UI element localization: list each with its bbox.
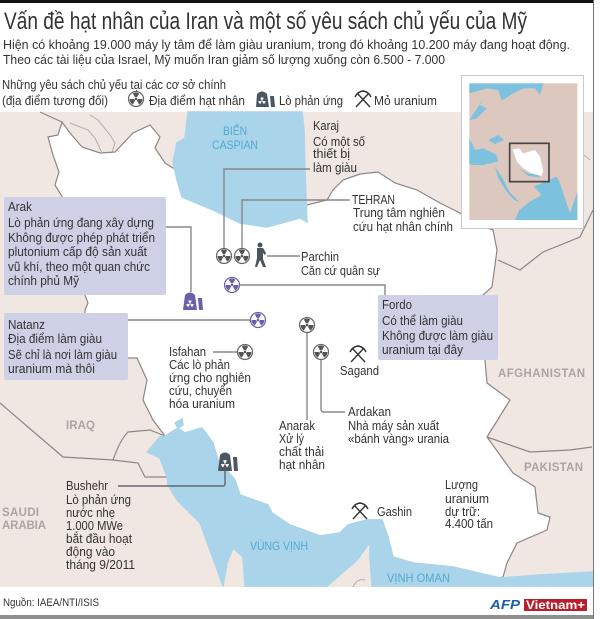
label: Parchin: Parchin <box>301 250 339 264</box>
country labels <box>2 368 585 532</box>
panel: Arak: plutonium cấp độ sản xuất <box>8 245 147 259</box>
map of Iran and neighbours <box>0 112 593 587</box>
sea label: Caspian <box>212 123 258 152</box>
icon: Parchin soldier <box>255 242 266 267</box>
label: Tehran: TEHRAN <box>352 193 395 207</box>
logo: AFP: AFP <box>489 597 520 612</box>
label: Sagand: Sagand <box>340 364 379 378</box>
label: Tehran: Trung tâm nghiên <box>353 206 445 220</box>
label: Karaj: làm giàu <box>313 161 357 175</box>
panel: Arak: Arak <box>8 200 33 214</box>
label: Ardakan: Nhà máy sản xuất <box>348 419 439 433</box>
country labels: PAKISTAN <box>524 462 583 474</box>
country labels: SAUDI <box>2 507 39 519</box>
Iran landmass <box>48 122 550 578</box>
label: uranium reserves: uranium <box>445 492 489 506</box>
Persian Gulf and Gulf of Oman <box>147 419 593 586</box>
panel: Fordo: Không được làm giàu <box>382 329 493 343</box>
label: uranium reserves: Lượng <box>445 478 478 492</box>
label: Karaj: Karaj <box>313 119 339 133</box>
icon: Arak reactor <box>183 292 203 310</box>
label: Bushehr: Bushehr <box>66 479 108 493</box>
inset locator map <box>462 76 584 228</box>
label: Ardakan: Ardakan <box>348 405 391 419</box>
icon: Natanz nuclear site <box>250 312 266 328</box>
label: Anarak: Anarak <box>279 419 316 433</box>
sea label: Vinh Oman: VỊNH OMAN <box>387 571 450 585</box>
intro text: Theo các tài liệu của Israel, Mỹ muốn Iran giảm số lượng xuống còn 6.500 - 7.000 <box>3 52 445 67</box>
intro text: Hiện có khoảng 19.000 máy ly tâm để làm giàu uranium, trong đó khoảng 10.200 máy đang hoạt động. <box>3 37 570 52</box>
right frame line <box>593 0 594 619</box>
panel: Arak: Không được phép phát triển <box>8 231 155 245</box>
icon: Gashin mine <box>352 503 368 519</box>
label: Anarak <box>279 419 325 472</box>
icon: Ardakan nuclear site <box>314 344 328 360</box>
label: Isfahan: Isfahan <box>169 345 206 359</box>
panel: Arak <box>4 197 166 295</box>
source note: Nguồn: IAEA/NTI/ISIS <box>3 597 99 609</box>
label: uranium reserves <box>445 478 493 531</box>
sea label: Caspian: CASPIAN <box>212 138 258 152</box>
legend: (địa điểm tương đối) <box>2 94 108 108</box>
panel: Fordo <box>378 295 498 360</box>
label: Karaj: Có một số <box>313 135 365 149</box>
neighbouring borders <box>0 112 593 587</box>
intro text <box>3 37 570 67</box>
label: Anarak: chất thải <box>279 445 324 459</box>
label: Karaj: thiết bị <box>313 147 350 161</box>
logo: Vietnam+: Vietnam+ <box>526 600 585 612</box>
panel: Natanz: Địa điểm làm giàu <box>8 332 102 346</box>
label: Bushehr: 1.000 MWe <box>66 519 123 533</box>
panel: Fordo: Fordo <box>382 298 412 312</box>
label: Bushehr: Lò phản ứng <box>66 493 131 507</box>
label: Bushehr: nước nhẹ <box>66 506 115 520</box>
label: Anarak: hạt nhân <box>279 458 325 472</box>
legend <box>2 78 437 108</box>
label: Gashin: Gashin <box>377 505 412 519</box>
sea label: Caspian: BIỂN <box>223 123 247 138</box>
panel: Fordo: Có thể làm giàu <box>382 314 463 328</box>
icon: Bushehr reactor <box>218 452 238 471</box>
label: Parchin: Căn cứ quân sự <box>301 264 380 278</box>
panel: Natanz <box>4 313 128 380</box>
icon: Tehran nuclear site <box>234 248 250 264</box>
icon: mine <box>355 91 371 107</box>
country labels: AFGHANISTAN <box>498 368 585 380</box>
label: Isfahan: hóa uranium <box>169 397 235 411</box>
leader lines <box>118 169 385 486</box>
icon: reactor <box>256 92 275 107</box>
icon: Fordo nuclear site <box>224 278 240 292</box>
panel: Arak: vũ khí, theo một quan chức <box>8 260 150 274</box>
legend: Địa điểm hạt nhân <box>149 94 245 108</box>
panel: Arak: Lò phản ứng đang xây dựng <box>8 216 154 230</box>
label: Isfahan: ứng cho nghiên <box>169 371 251 385</box>
legend: Những yêu sách chủ yếu tại các cơ sở chính <box>2 78 226 92</box>
sea label: Vung Vinh: VÙNG VỊNH <box>250 538 308 553</box>
label: Parchin <box>301 250 380 278</box>
label: Bushehr: động vào <box>66 545 115 559</box>
Caspian Sea <box>173 112 307 227</box>
icon: Karaj nuclear site <box>216 248 232 264</box>
label: Isfahan: cứu, chuyển <box>169 384 232 398</box>
label: Ardakan: «bánh vàng» urania <box>348 432 449 446</box>
icon: nuclear site <box>128 92 144 106</box>
legend: Lò phản ứng <box>279 94 343 108</box>
panel: Fordo: uranium tại đây <box>382 343 464 357</box>
label: Anarak: Xử lý <box>279 432 305 446</box>
panel: Arak: chính phủ Mỹ <box>8 274 80 288</box>
country labels: IRAQ <box>66 420 95 432</box>
label: Tehran: cứu hạt nhân chính <box>353 220 453 234</box>
legend: Mỏ uranium <box>374 94 437 108</box>
label: Bushehr <box>66 479 135 572</box>
icon: Isfahan nuclear site <box>238 344 252 360</box>
country labels: ARABIA <box>2 520 46 532</box>
label: uranium reserves: 4.400 tấn <box>445 517 493 531</box>
icon: Sagand mine <box>350 346 366 362</box>
label: Ardakan <box>348 405 449 446</box>
label: Tehran <box>352 193 453 234</box>
panel: Natanz: Sẽ chỉ là nơi làm giàu <box>8 348 117 362</box>
label: uranium reserves: dự trữ: <box>445 505 480 519</box>
panel: Natanz: Natanz <box>8 318 45 332</box>
icon: Anarak nuclear site <box>300 318 314 332</box>
label: Bushehr: tháng 9/2011 <box>66 558 135 572</box>
label: Isfahan <box>169 345 251 411</box>
label: Karaj <box>313 119 365 175</box>
label: Isfahan: Các lò phản <box>169 358 230 372</box>
panel: Natanz: uranium mà thôi <box>8 362 95 376</box>
label: Bushehr: bắt đầu hoạt <box>66 531 132 546</box>
